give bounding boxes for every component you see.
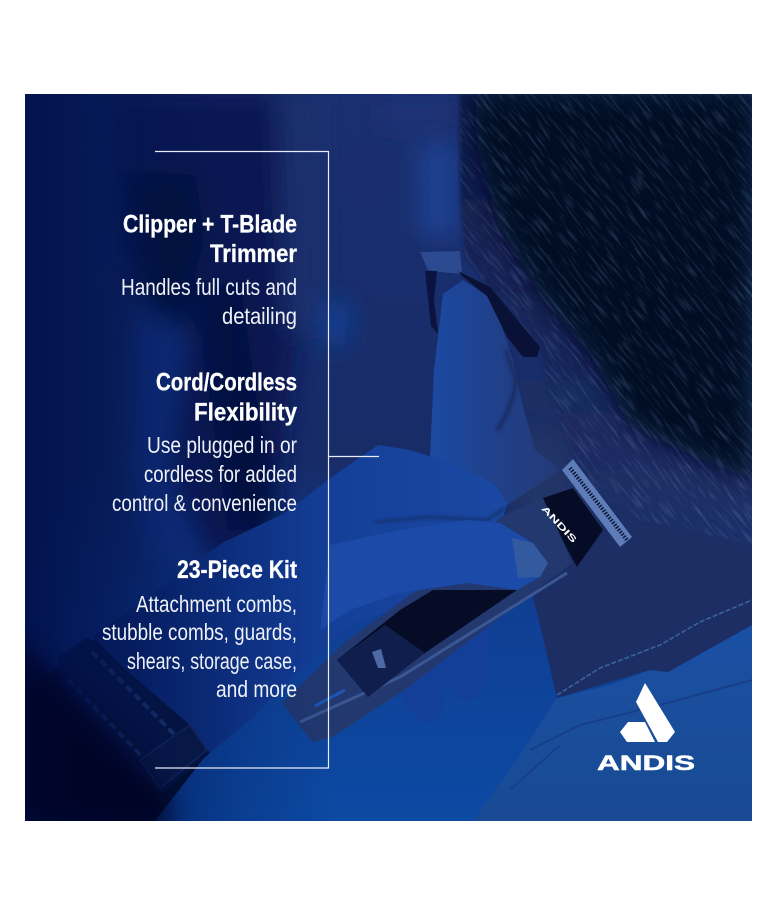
feature: Cord/Cordless Flexibility: Flexibility: [194, 398, 297, 426]
glasses lens rim: [425, 271, 438, 334]
clipper lower highlight: [300, 573, 567, 722]
feature: 23-Piece Kit: [102, 556, 298, 702]
feature: Clipper + T-Blade Trimmer: Trimmer: [210, 240, 297, 268]
hair outer fade: [460, 94, 752, 545]
thumb: [320, 520, 548, 630]
watch clasp: [140, 725, 207, 788]
hand knuckle shadow: [375, 508, 505, 522]
feature: Clipper + T-Blade Trimmer: Handles full cuts and: [121, 274, 297, 300]
feature: Cord/Cordless Flexibility: cordless for added: [144, 461, 297, 487]
T-blade teeth: [570, 468, 627, 540]
neck shading near hairline: [500, 430, 590, 560]
ear crease: [497, 350, 516, 430]
clipper base stripe: [315, 690, 345, 706]
clipper body: [282, 498, 572, 742]
feature: 23-Piece Kit: stubble combs, guards,: [102, 619, 297, 645]
hair texture: [460, 94, 752, 544]
logo mark: stylised A: [620, 683, 675, 742]
clipper head logo: ANDIS: [540, 504, 579, 545]
necklace: [557, 600, 752, 695]
feature: Cord/Cordless Flexibility: [112, 368, 297, 516]
watch links: [68, 651, 176, 756]
photo backdrop: [25, 94, 752, 821]
shirt: [473, 625, 752, 821]
feature: Cord/Cordless Flexibility: control & convenience: [112, 490, 297, 516]
glasses bar: [420, 251, 462, 274]
infographic canvas: [25, 94, 752, 821]
photo panel: man being trimmed: [25, 94, 752, 821]
T-blade: [562, 459, 632, 547]
neck skin: [504, 498, 752, 698]
clipper logo tick: [372, 649, 386, 668]
feature: Clipper + T-Blade Trimmer: [121, 210, 297, 329]
bottom-left shadow: [15, 640, 170, 830]
feature: Cord/Cordless Flexibility: Use plugged in or: [147, 432, 297, 458]
shirt seam: [510, 680, 752, 790]
clipper head: [543, 488, 603, 567]
lower fingers: [400, 625, 490, 722]
feature: Clipper + T-Blade Trimmer: detailing: [222, 303, 297, 329]
feature: 23-Piece Kit: 23-Piece Kit: [177, 556, 298, 584]
feature: 23-Piece Kit: shears, storage case,: [127, 648, 297, 674]
ear: [430, 280, 560, 510]
glasses temple: [458, 271, 540, 357]
watch: [58, 637, 210, 793]
left dark gradient overlay: [25, 94, 292, 821]
feature: Cord/Cordless Flexibility: Cord/Cordless: [156, 368, 297, 396]
clipper lower panel: [337, 625, 425, 697]
hair dark core: [475, 94, 752, 480]
thumb nail: [512, 538, 548, 578]
brand logo: Andis: ANDIS: [597, 752, 695, 775]
bracket line frame: [155, 152, 379, 768]
forearm shadow: [54, 640, 204, 821]
feature: 23-Piece Kit: and more: [216, 676, 297, 702]
brand logo: Andis: [597, 683, 695, 775]
arm and hand: [107, 445, 507, 752]
feature: Clipper + T-Blade Trimmer: Clipper + T-Blade: [123, 210, 297, 238]
blurred mirror shapes: [110, 94, 458, 560]
clipper grip pad: [337, 590, 517, 697]
feature: 23-Piece Kit: Attachment combs,: [136, 591, 297, 617]
